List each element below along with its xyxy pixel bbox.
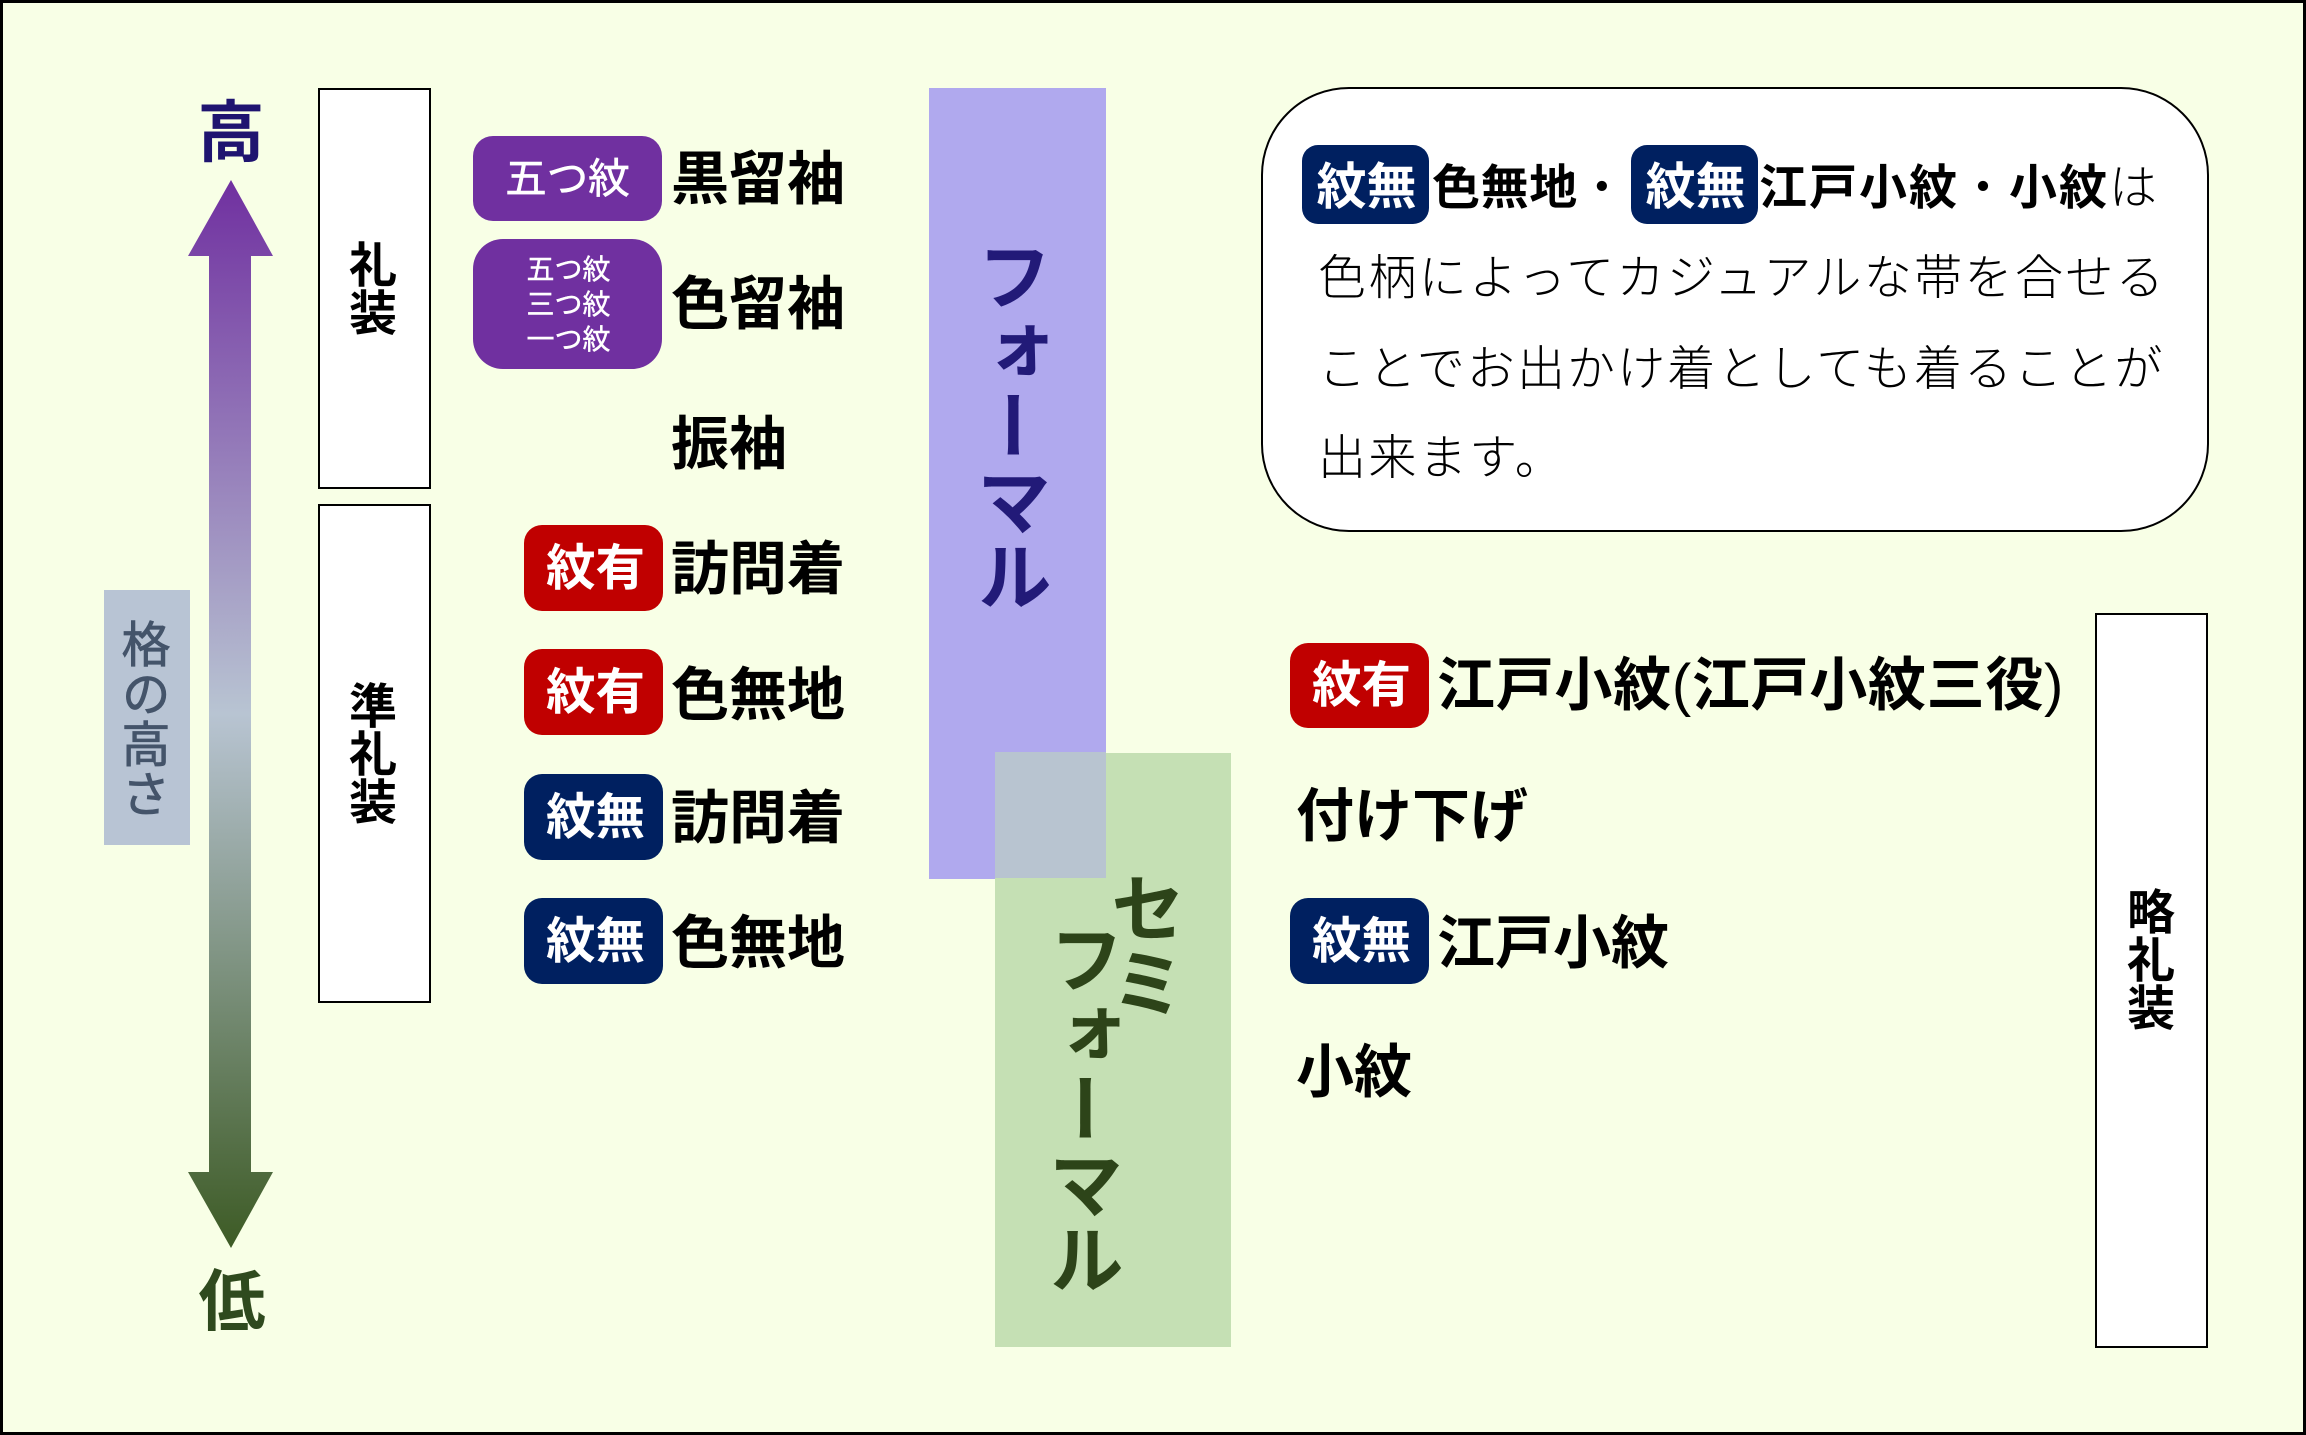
badge: five three one crests: 一つ紋 (526, 324, 610, 354)
badge: no crest: 紋無 (546, 790, 645, 844)
badge: no crest (524, 898, 663, 984)
item: edo komon three marks: 江戸小紋(江戸小紋三役) (1437, 653, 2064, 718)
item: edo komon: 江戸小紋 (1437, 911, 1669, 976)
panel: semi formal band (995, 753, 1231, 1347)
item: iromuji: 色無地 (671, 663, 845, 728)
item: irotomesode: 色留袖 (671, 272, 845, 337)
item: kurotomesode: 黒留袖 (671, 147, 845, 212)
item: iromuji: 色無地 (671, 911, 845, 976)
item: tsukesage: 付け下げ (1296, 784, 1528, 849)
badge: no crest: 紋無 (1312, 914, 1411, 968)
item: houmongi: 訪問着 (671, 537, 845, 602)
arrow: formality scale from high to low (188, 180, 273, 1248)
panel: informal dress (2095, 613, 2208, 1348)
label: formal: フォーマル (966, 238, 1050, 612)
callout badge: no crest (1631, 145, 1758, 224)
callout text: line four: 出来ます。 (1318, 432, 1565, 485)
label: low: 低 (198, 1265, 266, 1340)
badge: no crest (524, 774, 663, 860)
text: semi formal dress: 準礼装 (341, 681, 394, 825)
label: high: 高 (198, 96, 264, 171)
panel: semi formal dress (318, 504, 431, 1003)
panel: formal band (929, 88, 1106, 879)
badge: no crest: 紋無 (546, 914, 645, 968)
callout text: edo komon and komon: 江戸小紋・小紋は (1759, 162, 2159, 215)
callout text: iromuji: 色無地・ (1432, 162, 1626, 215)
callout text: line two: 色柄によってカジュアルな帯を合せる (1318, 252, 2166, 305)
badge: with crest (1290, 643, 1429, 728)
label: formal in semi formal: フォーマル (1038, 920, 1122, 1296)
badge: with crest: 紋有 (1312, 658, 1411, 713)
item: komon: 小紋 (1296, 1040, 1412, 1105)
callout badge: no crest (1302, 145, 1429, 224)
badge: five three one crests (473, 239, 662, 369)
callout badge: no crest: 紋無 (1316, 158, 1416, 214)
overlap of formal and semi formal bands (995, 752, 1106, 878)
callout badge: no crest: 紋無 (1646, 158, 1746, 214)
badge: no crest (1290, 898, 1429, 984)
badge: five three one crests: 三つ紋 (526, 288, 610, 320)
badge: five crests: 五つ紋 (505, 154, 630, 202)
label: height of rank (104, 590, 190, 845)
panel: full formal dress (318, 88, 431, 489)
badge: with crest (524, 649, 663, 735)
label: semi: セミ (1100, 870, 1184, 1020)
text: full formal dress: 礼装 (341, 240, 394, 336)
callout: note on casual wear (1261, 87, 2209, 532)
text: informal dress: 略礼装 (2119, 887, 2172, 1031)
badge: with crest (524, 525, 663, 611)
text: height of rank: 格の高さ (114, 618, 168, 818)
badge: five crests (473, 136, 662, 221)
badge: with crest: 紋有 (546, 664, 645, 720)
item: houmongi: 訪問着 (671, 786, 845, 851)
badge: five three one crests: 五つ紋 (526, 254, 610, 284)
callout text: line three: ことでお出かけ着としても着ることが (1318, 343, 2164, 396)
item: furisode: 振袖 (671, 412, 787, 477)
badge: with crest: 紋有 (546, 540, 645, 596)
